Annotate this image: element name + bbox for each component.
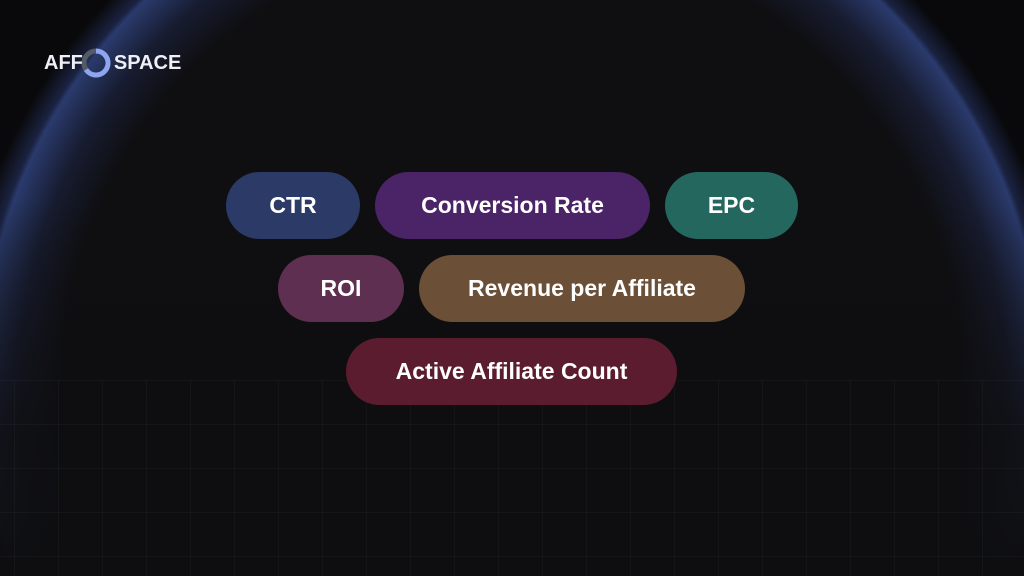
logo: AFF	[44, 52, 83, 74]
pill: Conversion Rate: Conversion Rate	[421, 192, 604, 218]
pill: Active Affiliate Count: Active Affiliate Count	[396, 358, 627, 384]
pill: Active Affiliate Count	[346, 338, 677, 405]
pill: Conversion Rate	[375, 172, 650, 239]
logo: SPACE	[114, 52, 181, 74]
pill: Revenue per Affiliate	[419, 255, 745, 322]
icon: logo ring	[82, 48, 110, 78]
pill: CTR	[226, 172, 360, 239]
pill: ROI	[278, 255, 404, 322]
pill: Revenue per Affiliate: Revenue per Affiliate	[468, 275, 696, 301]
pill: ROI: ROI	[321, 275, 361, 301]
logo	[44, 48, 181, 78]
pill: CTR: CTR	[269, 192, 317, 218]
pill: EPC: EPC	[708, 192, 755, 218]
pill: EPC	[665, 172, 798, 239]
